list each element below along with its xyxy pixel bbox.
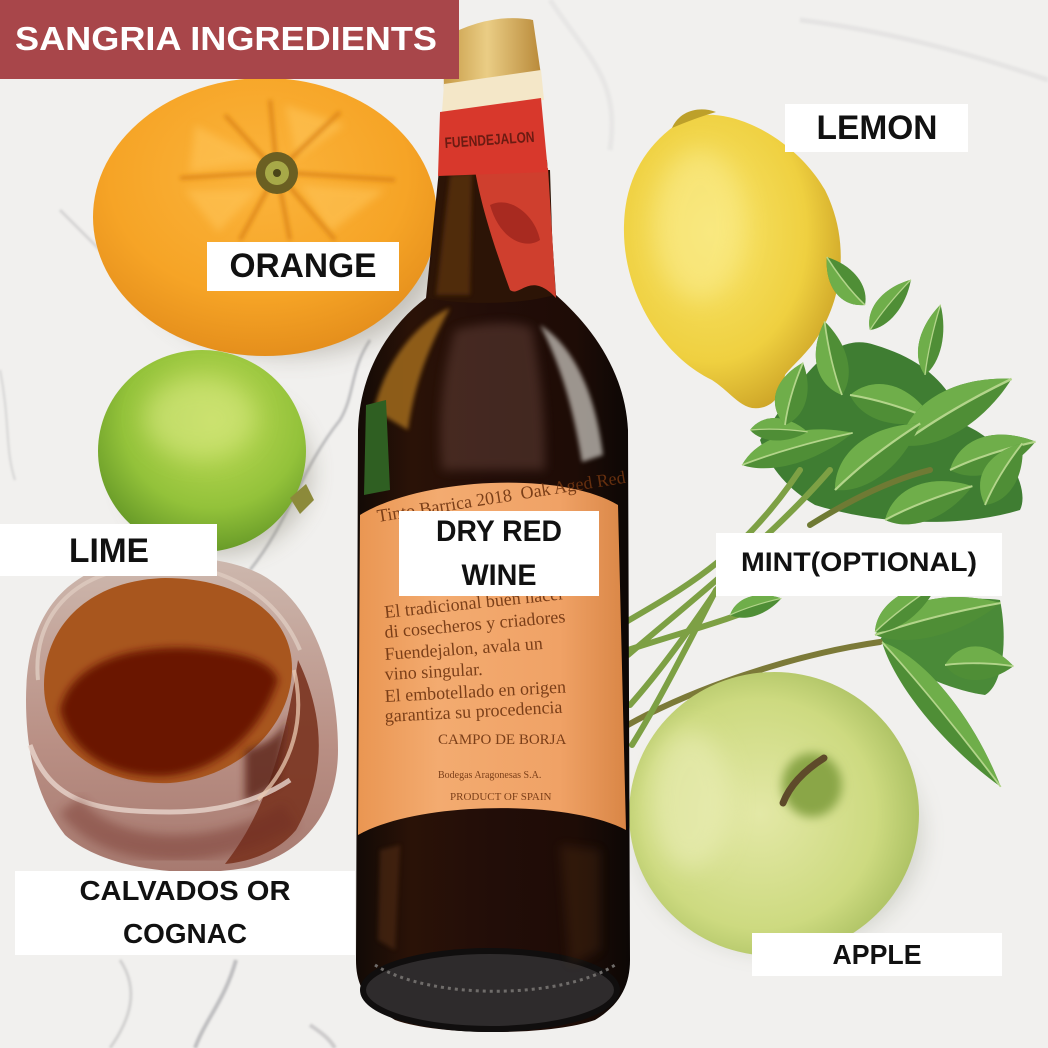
- title banner: SANGRIA INGREDIENTS: [15, 20, 437, 57]
- label: dry red wine: DRY RED: [436, 515, 562, 548]
- bottle orange label: El tradicional buen hacer: [383, 583, 565, 622]
- icon: orange fruit: [93, 78, 440, 356]
- bottle orange label: Fuendejalon, avala un: [384, 633, 543, 664]
- icon: mint sprig: [626, 249, 1040, 797]
- label: orange: ORANGE: [230, 247, 376, 285]
- bottle cap foil: [438, 18, 548, 176]
- icon: lemon: [624, 109, 841, 408]
- label: orange: [207, 242, 399, 291]
- bottle orange label: [358, 467, 627, 835]
- bottle cap foil: FUENDEJALON: [444, 129, 535, 152]
- title banner: [0, 0, 459, 79]
- bottle orange label: garantiza su procedencia: [384, 697, 563, 726]
- label: lime: [0, 524, 217, 576]
- icon: green apple: [629, 672, 920, 956]
- label: mint (optional): [716, 533, 1002, 596]
- bottle orange label: PRODUCT OF SPAIN: [450, 791, 552, 803]
- bottle orange label: CAMPO DE BORJA: [438, 732, 567, 748]
- label: apple: [752, 933, 1002, 976]
- icon: glass of cognac: [26, 557, 338, 872]
- bottle orange label: Bodegas Aragonesas S.A.: [438, 770, 541, 781]
- icon: wine bottle: [356, 18, 630, 1032]
- icon: lime: [98, 350, 314, 554]
- bottle orange label: El embotellado en origen: [384, 677, 566, 706]
- label: mint (optional): MINT(OPTIONAL): [741, 547, 977, 577]
- label: dry red wine: [399, 511, 599, 596]
- bottle orange label: vino singular.: [384, 659, 483, 684]
- label: lime: LIME: [69, 532, 149, 570]
- label: calvados or cognac: [15, 871, 355, 955]
- label: apple: APPLE: [832, 939, 922, 970]
- bottle orange label: Tinto Barrica 2018 Oak Aged Red: [375, 467, 627, 526]
- label: lemon: LEMON: [816, 109, 938, 147]
- label: dry red wine: WINE: [462, 559, 536, 592]
- label: lemon: [785, 104, 968, 152]
- bottle neck red seal: [474, 165, 556, 298]
- bottle orange label: di cosecheros y criadores: [384, 606, 566, 642]
- label: calvados or cognac: CALVADOS OR: [80, 875, 290, 906]
- label: calvados or cognac: COGNAC: [123, 918, 247, 949]
